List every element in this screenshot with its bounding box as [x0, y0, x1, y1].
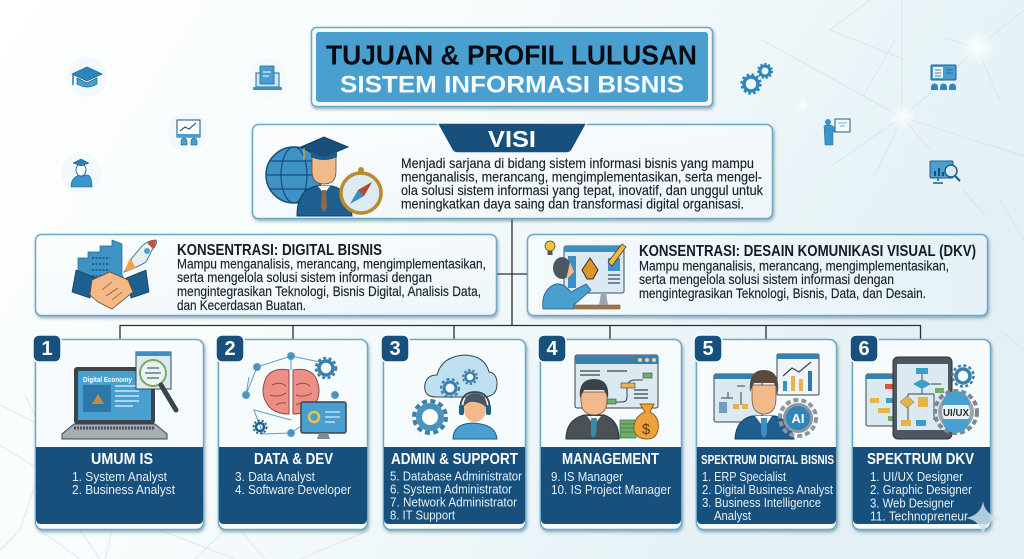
icon: cloud, gears and support agent	[414, 355, 497, 439]
title: SPEKTRUM DIGITAL BISNIS	[701, 453, 834, 467]
number badge: 2	[224, 338, 236, 360]
list: 1. System Analyst	[72, 469, 167, 484]
card 3: admin and support	[381, 335, 526, 530]
card footer	[541, 447, 681, 524]
heading: KONSENTRASI: DIGITAL BISNIS	[177, 242, 382, 259]
number badge: 3	[389, 338, 401, 360]
card 1: umum is	[33, 335, 204, 530]
icon: analytics with magnifier	[930, 161, 960, 183]
list: 11. Technopreneur	[870, 508, 969, 524]
panel: konsentrasi dkv	[528, 234, 988, 316]
list	[702, 469, 833, 523]
icon: monitor with users	[168, 112, 208, 152]
list: 6. System Administrator	[390, 482, 513, 496]
card footer	[384, 447, 525, 524]
list: 9. IS Manager	[551, 469, 624, 484]
description	[177, 256, 486, 313]
number badge: 5	[702, 338, 714, 360]
icon: laptop with book	[247, 58, 287, 98]
icon: manager, dashboard and money	[566, 355, 658, 439]
description: mengintegrasikan Teknologi, Bisnis Digital, Analisis Data,	[177, 283, 481, 299]
card 5: spektrum digital bisnis	[694, 335, 836, 530]
number badge	[216, 335, 244, 362]
list: 2. Business Analyst	[72, 482, 175, 497]
number badge	[381, 335, 409, 362]
card footer	[36, 447, 203, 524]
icon: graduate with globe and compass	[266, 137, 381, 216]
panel: visi	[252, 123, 772, 218]
list: Analyst	[714, 508, 751, 523]
card 2: data and dev	[216, 335, 368, 530]
icon: tablet flowchart and ui/ux gear	[866, 357, 977, 439]
sparkle watermark	[966, 501, 1000, 536]
number badge: 6	[858, 338, 870, 360]
visi ribbon	[437, 123, 587, 153]
list	[235, 469, 352, 497]
list: 4. Software Developer	[235, 482, 352, 497]
number badge: 1	[41, 338, 53, 360]
visi ribbon: VISI	[488, 126, 536, 152]
vision text: Menjadi sarjana di bidang sistem informasi bisnis yang mampu	[401, 155, 754, 171]
icon: laptop: Digital Economy	[83, 375, 133, 384]
icon: manager, dashboard and money: $	[642, 421, 651, 438]
panel: konsentrasi digital bisnis	[36, 234, 496, 316]
list: 1. UI/UX Designer	[870, 469, 964, 484]
number badge: 4	[546, 338, 558, 360]
connector lines	[120, 219, 920, 339]
card footer	[853, 447, 990, 524]
vision text	[401, 155, 764, 212]
icon: tablet flowchart and ui/ux gear: UI/UX	[943, 408, 969, 419]
title: MANAGEMENT	[562, 451, 659, 468]
number badge	[33, 335, 61, 362]
vision text: meningkatkan daya saing dan transformasi digital organisasi.	[401, 196, 744, 212]
title: UMUM IS	[91, 451, 153, 468]
title: SPEKTRUM DKV	[867, 451, 974, 468]
icon: specialist with ai gear	[714, 354, 819, 439]
icon: brain and monitor	[242, 352, 346, 439]
list	[72, 469, 175, 497]
description: Mampu menganalisis, merancang, mengimplementasikan,	[177, 256, 486, 272]
icon: graduate	[61, 153, 101, 193]
icon: designer at monitor	[543, 241, 626, 309]
title: ADMIN & SUPPORT	[391, 451, 518, 468]
description: serta mengelola solusi sistem informasi dengan	[177, 269, 432, 285]
description: dan Kecerdasan Buatan.	[177, 297, 306, 313]
icon: presentation	[931, 65, 956, 90]
number badge	[850, 335, 878, 362]
number badge	[538, 335, 566, 362]
icon: graduation cap	[67, 57, 107, 97]
vision text: ola solusi sistem informasi yang tepat, inovatif, dan unggul untuk	[401, 182, 764, 198]
title: DATA & DEV	[254, 451, 333, 468]
list	[551, 469, 672, 497]
list: 5. Database Administrator	[390, 468, 523, 484]
vision text: menganalisis, merancang, mengimplementasikan, serta mengel-	[401, 168, 762, 184]
icon: specialist with ai gear: AI	[792, 411, 804, 426]
icon: laptop	[62, 352, 176, 439]
description: serta mengelola solusi sistem informasi dengan	[639, 271, 894, 287]
list: 10. IS Project Manager	[551, 482, 672, 497]
list: 3. Data Analyst	[235, 469, 315, 484]
icon: teacher	[824, 119, 850, 145]
list: 1. ERP Specialist	[702, 469, 786, 484]
description: mengintegrasikan Teknologi, Bisnis, Data, dan Desain.	[639, 285, 926, 301]
card footer	[697, 447, 836, 524]
list: 8. IT Support	[390, 508, 455, 522]
card 4: management	[538, 335, 682, 530]
number badge	[694, 335, 722, 362]
list: 2. Digital Business Analyst	[702, 482, 833, 497]
list	[390, 468, 523, 522]
card 6: spektrum dkv	[850, 335, 990, 530]
title line 2: SISTEM INFORMASI BISNIS	[340, 72, 684, 98]
card footer	[219, 447, 367, 524]
list: 3. Web Designer	[870, 496, 955, 510]
description: Mampu menganalisis, merancang, mengimplementasikan,	[639, 258, 949, 274]
list	[870, 469, 973, 524]
list: 2. Graphic Designer	[870, 482, 973, 497]
description	[639, 258, 949, 301]
title banner	[312, 28, 712, 106]
icon: handshake, city and rocket	[72, 240, 156, 309]
list: 7. Network Administrator	[390, 494, 518, 510]
list: 3. Business Intelligence	[702, 495, 821, 510]
title line 1: TUJUAN & PROFIL LULUSAN	[326, 40, 697, 70]
icon: gears	[742, 64, 772, 94]
